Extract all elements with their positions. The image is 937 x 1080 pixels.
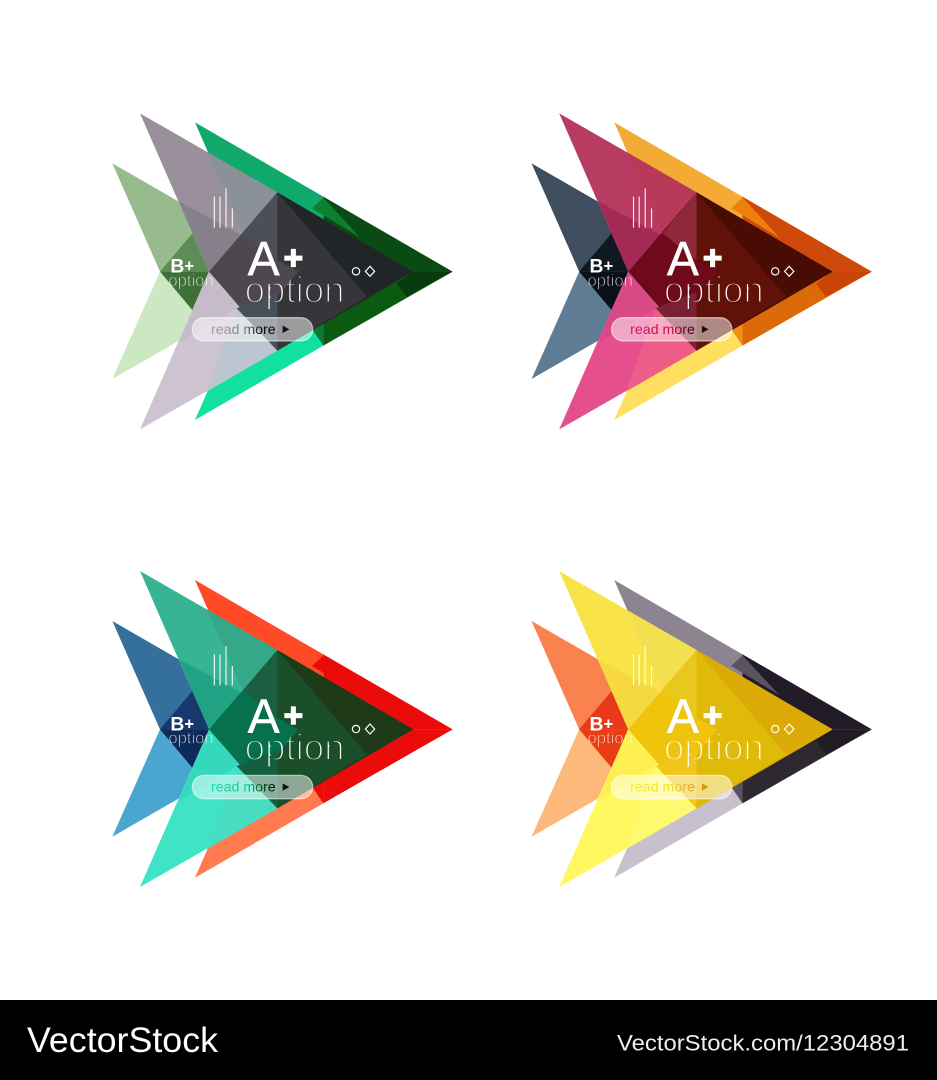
text: option: option: [664, 269, 764, 310]
sub heading: B+ option: option: [168, 271, 214, 290]
image reference: VectorStock.com/12304891: [617, 1030, 909, 1056]
middle arrow: [140, 113, 413, 429]
back arrow: [614, 580, 872, 878]
heading: A+: A: [667, 233, 699, 286]
middle arrow: [140, 571, 413, 887]
panel: teal and red arrow infographic: [112, 571, 453, 887]
button: read more: read more: [630, 780, 695, 796]
back arrow: [195, 580, 453, 878]
text: option: option: [245, 727, 345, 768]
panel: yellow and black arrow infographic: [532, 571, 872, 887]
button: read more: [612, 318, 732, 341]
sub heading: B+ option: +: [184, 257, 194, 276]
icon: bar lines: [214, 646, 232, 685]
back arrow: [614, 122, 872, 420]
sub heading: B+ option: [588, 259, 632, 290]
sub heading: B+ option: option: [168, 729, 214, 748]
panel: green and grey arrow infographic: [112, 113, 453, 429]
text: option: option: [664, 727, 764, 768]
icon: bar lines: [634, 188, 652, 228]
heading: A+: A: [248, 233, 280, 286]
footer band: [0, 1000, 937, 1080]
sub heading: B+ option: [170, 717, 212, 747]
heading: A+: [667, 233, 722, 286]
heading: A+: A: [248, 691, 280, 744]
sub heading: B+ option: option: [588, 271, 633, 290]
button: read more: read more: [211, 780, 276, 796]
button: read more: read more: [630, 322, 695, 338]
sub heading: B+ option: +: [604, 257, 614, 276]
sub heading: B+ option: +: [604, 714, 614, 733]
button: read more: read more: [211, 322, 276, 338]
sub heading: B+ option: B: [590, 714, 604, 735]
heading: A+: +: [703, 240, 722, 277]
sub heading: B+ option: option: [588, 729, 633, 748]
heading: A+: +: [703, 698, 722, 735]
brand name: VectorStock: [27, 1021, 219, 1060]
sub heading: B+ option: B: [590, 257, 604, 278]
middle arrow: [559, 571, 833, 887]
button: read more: [192, 318, 313, 341]
middle arrow: [559, 113, 833, 429]
icon: bar lines: [214, 188, 232, 228]
button: read more: [612, 775, 732, 799]
icon: circle and diamond: [352, 266, 375, 276]
sub heading: B+ option: [170, 259, 212, 290]
icon: circle and diamond: [772, 266, 794, 276]
sub heading: B+ option: +: [184, 714, 194, 733]
left arrow: [532, 621, 636, 837]
heading: A+: [248, 233, 303, 286]
left arrow: [112, 163, 217, 379]
icon: bar lines: [634, 646, 652, 685]
sub heading: B+ option: [588, 717, 632, 747]
back arrow: [195, 122, 453, 420]
heading: A+: [667, 691, 722, 744]
heading: A+: +: [284, 240, 303, 277]
button: read more: [192, 775, 313, 799]
left arrow: [532, 163, 636, 379]
sub heading: B+ option: B: [170, 714, 184, 735]
icon: circle and diamond: [772, 724, 794, 734]
heading: A+: A: [667, 691, 699, 744]
heading: A+: [248, 691, 303, 744]
icon: circle and diamond: [352, 724, 375, 734]
heading: A+: +: [284, 698, 303, 735]
panel: pink and orange arrow infographic: [532, 113, 872, 429]
text: option: option: [245, 269, 345, 310]
sub heading: B+ option: B: [170, 257, 184, 278]
left arrow: [112, 621, 217, 837]
